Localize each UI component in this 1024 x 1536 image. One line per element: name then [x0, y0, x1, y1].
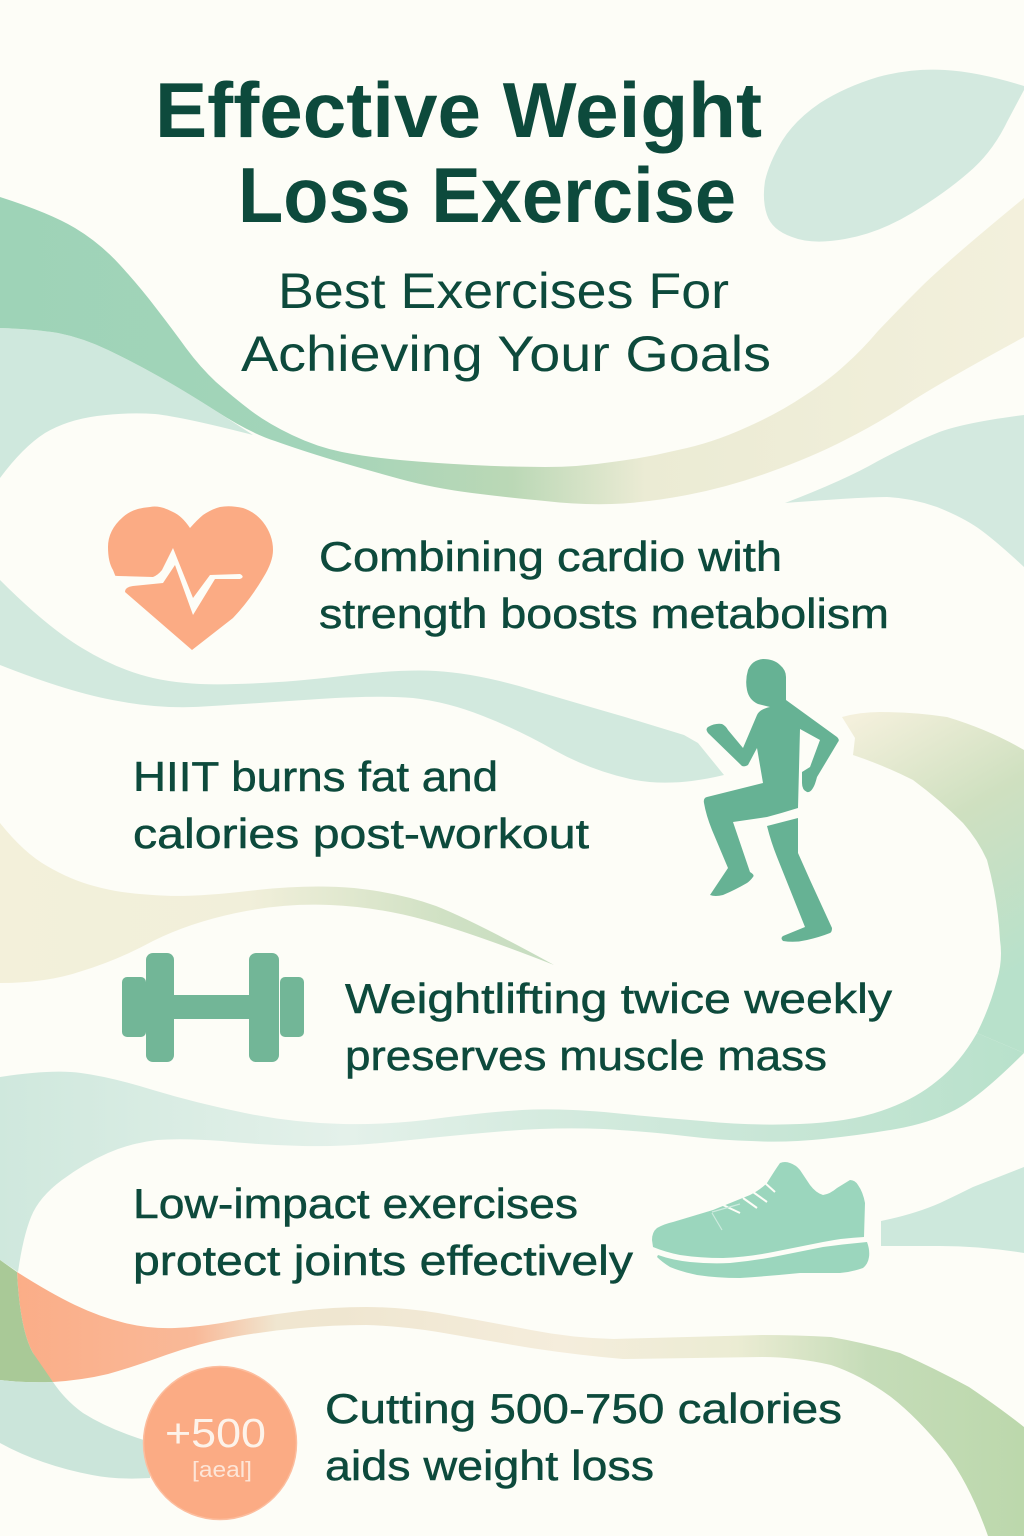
icon: heart with pulse [100, 506, 273, 650]
text: cardio with strength: strength boosts metabolism [319, 590, 889, 637]
text: cardio with strength [319, 533, 889, 637]
text: calories: Cutting 500-750 calories [325, 1385, 842, 1432]
text: HIIT: calories post-workout [133, 810, 589, 857]
text: low impact: protect joints effectively [133, 1237, 633, 1284]
cream swoosh left [0, 823, 554, 983]
text: low impact [133, 1180, 633, 1284]
teal band with point at runner [0, 580, 724, 783]
text: weightlifting: Weightlifting twice weekly [345, 975, 892, 1022]
teal strip beside shoe [881, 1167, 1024, 1253]
light teal band upper left [0, 328, 253, 478]
subtitle: Achieving Your Goals [241, 326, 771, 382]
text: weightlifting: preserves muscle mass [345, 1032, 827, 1079]
green to cream swoosh [0, 197, 1024, 504]
title: Loss Exercise [238, 151, 736, 239]
text: weightlifting [345, 975, 892, 1079]
icon: sneaker [652, 1162, 869, 1278]
leaf shape top right [764, 70, 1024, 242]
text: cardio with strength: Combining cardio with [319, 533, 782, 580]
icon: dumbbell [122, 953, 304, 1062]
lower wave band [0, 1033, 1024, 1272]
text: calories [325, 1385, 842, 1489]
peach to green lower swoosh [17, 1272, 1024, 1536]
badge unit: [aeal] [192, 1457, 252, 1482]
icon: running figure [704, 659, 839, 942]
title [155, 66, 762, 239]
icon: calorie badge [144, 1366, 296, 1520]
big right curve [842, 712, 1024, 1053]
light teal right band [785, 415, 1024, 567]
teal bottom left band [0, 1380, 150, 1479]
text: HIIT [133, 753, 589, 857]
text: low impact: Low-impact exercises [133, 1180, 578, 1227]
subtitle [241, 263, 771, 382]
olive overlap [0, 1260, 53, 1382]
text: HIIT: HIIT burns fat and [133, 753, 498, 800]
subtitle: Best Exercises For [278, 263, 729, 319]
text: calories: aids weight loss [325, 1442, 654, 1489]
title: Effective Weight [155, 66, 762, 154]
badge value: +500 [165, 1410, 266, 1456]
